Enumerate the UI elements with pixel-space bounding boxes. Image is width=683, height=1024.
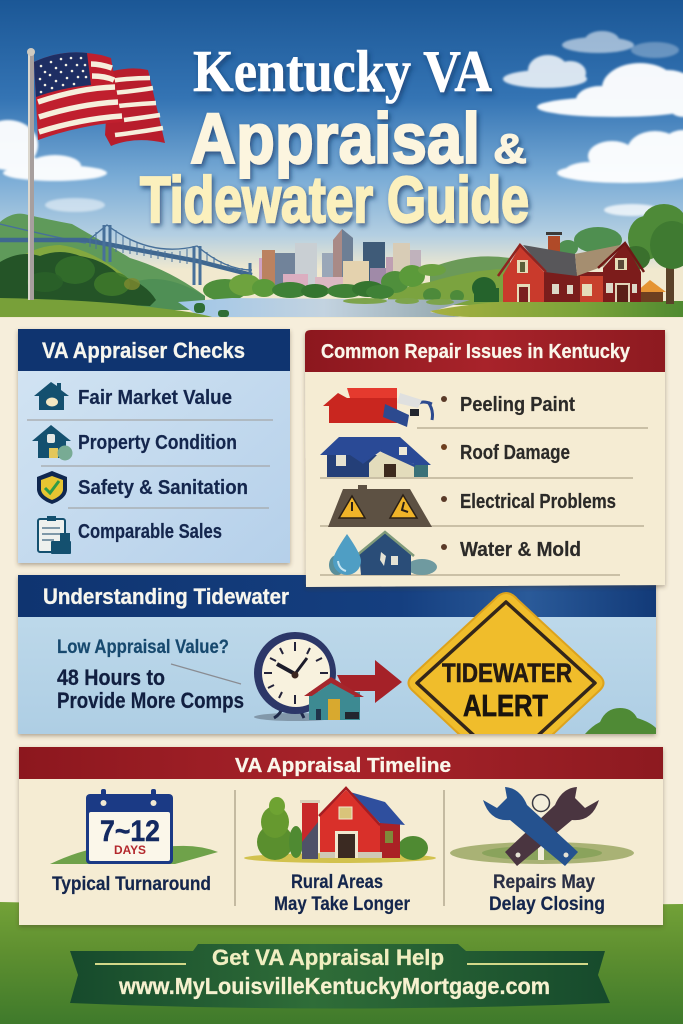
48 hours text [57,665,244,713]
icon: house condition [32,425,72,460]
panel: Common Repair Issues in Kentucky [305,330,665,587]
label: Comparable Sales [78,521,222,543]
icon: shield check [37,471,67,504]
dark bushes left [0,252,156,306]
heading: VA Appraisal Timeline [235,755,451,777]
arrow [337,660,402,703]
sign text: ALERT [463,688,548,723]
label: Repairs May [493,872,595,893]
icon: house value [34,382,69,410]
panel: VA Appraiser Checks [18,329,290,563]
green hills [18,245,175,315]
icon: clipboard [38,516,71,554]
calendar unit: DAYS [114,845,146,857]
American flag [34,52,165,146]
icon: roof damage [320,437,431,477]
label: Peeling Paint [460,394,575,416]
bullet [441,496,447,502]
heading: Common Repair Issues in Kentucky [321,341,631,363]
river shoreline foliage [343,298,454,305]
grass ground [0,902,683,1024]
gazebo [636,280,666,302]
header bar [19,747,663,779]
trees behind barn [558,227,622,256]
background: paper [0,315,683,935]
icon: crossed wrenches [450,787,634,866]
title [140,38,529,236]
tree line [203,264,499,302]
icon: small house [304,677,364,720]
river bushes [194,303,229,317]
heading: Understanding Tidewater [43,584,289,609]
label: Water & Mold [460,539,581,561]
48 hours text: 48 Hours to [57,665,165,690]
title line: Tidewater Guide: Tidewater Guide [140,163,529,236]
label: Delay Closing [489,894,605,915]
banner heading: Get VA Appraisal Help [212,945,444,970]
title ampersand: & [493,125,527,172]
icon: clock [254,632,338,721]
right bank [430,301,683,317]
sign shape [407,592,604,734]
header bar [18,329,290,371]
label: Fair Market Value [78,387,232,409]
flag pole [27,48,35,300]
label [274,872,411,915]
tidewater alert sign [407,592,604,734]
calendar number: 7~12 [100,815,160,848]
label: May Take Longer [274,894,411,915]
header bar [18,575,656,617]
label: Property Condition [78,432,237,454]
label: Roof Damage [460,442,570,464]
panel: VA Appraisal Timeline [19,747,663,925]
icon: water and mold [329,532,437,575]
big tree [622,204,683,304]
city skyline [259,229,421,291]
bridge [0,224,252,285]
icon: red barn [244,788,436,863]
icon: peeling paint [323,388,432,427]
48 hours text: Provide More Comps [57,688,244,713]
icon: electrical warning roof [328,485,432,527]
distant hills [0,214,205,300]
landscape: hills, river and skyline [0,214,683,317]
panel: Understanding Tidewater [15,574,659,739]
label: Safety & Sanitation [78,477,248,499]
river [178,298,470,317]
red farmhouse [498,204,683,304]
bush [585,708,656,734]
banner website: www.MyLouisvilleKentuckyMortgage.com [118,973,550,999]
label: Electrical Problems [460,491,616,513]
label: Typical Turnaround [52,874,211,895]
left bank [0,298,212,317]
bullet [441,544,447,550]
title line: Kentucky VA: Kentucky VA [193,38,492,104]
header bar [305,330,665,372]
label [489,872,605,915]
heading: VA Appraiser Checks [42,338,245,363]
icon: calendar [50,789,218,864]
clouds [0,31,683,216]
label: Rural Areas [291,872,383,893]
bullet [441,444,447,450]
bullet [441,396,447,402]
question text: Low Appraisal Value? [57,637,229,658]
sign text: TIDEWATER [442,658,572,688]
ribbon banner: call to action [70,944,610,1008]
background: sky [0,0,683,318]
title line: Appraisal: Appraisal [190,100,480,179]
